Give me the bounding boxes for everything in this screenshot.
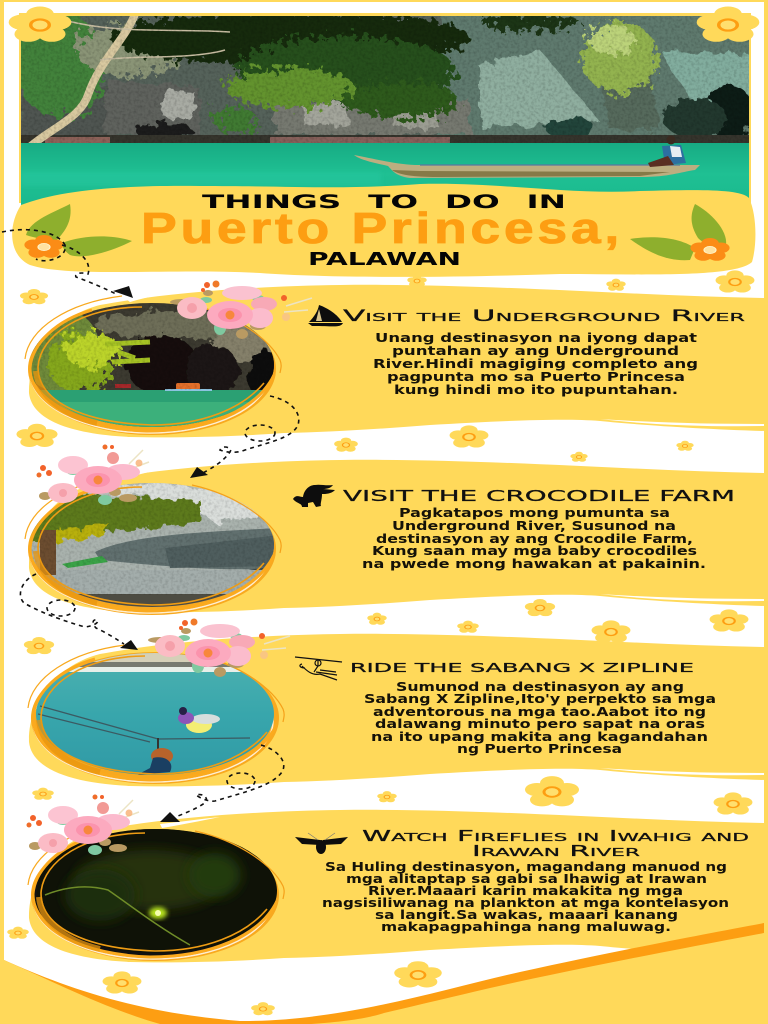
dashed arrow: panel 3 to panel 4 (160, 745, 284, 822)
dashed arrow: title to panel 1 (2, 230, 133, 298)
bottom yellow and orange swoosh (4, 923, 764, 1024)
icon: right leaves and flower (630, 204, 730, 261)
panel 2 body text: na pwede mong hawakan at pakainin. (362, 557, 706, 571)
title line: Palawan: PALAWAN (308, 249, 461, 270)
panel 2 icon: crocodile (293, 485, 335, 507)
panel 3 body text (364, 680, 716, 756)
section panels background (29, 285, 764, 962)
panel 4 body text: mga alitaptap sa gabi sa Ihawig at Irawan (346, 872, 707, 886)
panel 2 body text: destinasyon ay ang Crocodile Farm, (376, 532, 693, 546)
panel 2 photo: crocodile farm (25, 476, 281, 615)
panel 3 body text: ng Puerto Princesa (457, 742, 622, 756)
panel 4 body text: nagsisiliwanag na plankton at mga kontelasyon (322, 896, 729, 910)
panel 1 icon: sailboat (308, 305, 343, 326)
panel 4 heading (362, 827, 749, 860)
panel 2 body text: Underground River, Susunod na (392, 519, 676, 533)
boatman (648, 136, 686, 167)
panel 3 body text: dalawang minuto pero sapat na oras (375, 717, 705, 731)
panel 4 heading: Watch Fireflies in Iwahig and (362, 827, 749, 845)
panel 1 body text: Unang destinasyon na iyong dapat (375, 331, 697, 345)
panel 1 heading: Visit the Underground River (343, 306, 746, 325)
panel 3 photo: zipline over sea (28, 645, 284, 784)
panel 1 body text: kung hindi mo ito pupuntahan. (394, 383, 678, 397)
panel 4 flowers (26, 794, 139, 855)
panel 1 flowers (170, 280, 312, 339)
panel 2 body text: Kung saan may mga baby crocodiles (372, 544, 697, 558)
panel 1 body text: pagpunta mo sa Puerto Princesa (387, 370, 685, 384)
panel 3 body text: Sumunod na destinasyon ay ang (396, 680, 684, 694)
panel 3 body text: adventorous na mga tao.Aabot ito ng (373, 705, 706, 719)
title line: things to do in: THINGS TO DO IN (202, 191, 566, 213)
panel 3 body text: na ito upang makita ang kagandahan (371, 730, 708, 744)
panel 2 flowers (36, 444, 149, 505)
panel 1 body text (373, 331, 698, 397)
panel 2 body text (362, 506, 706, 571)
panel 4 body text: sa langit.Sa wakas, maaari kanang (375, 908, 678, 922)
panel 1 photo: underground river cave (20, 296, 281, 435)
panel 4 icon: firefly (295, 833, 348, 854)
dashed arrow: panel 2 to panel 3 (20, 574, 138, 650)
boat (354, 155, 700, 178)
dashed arrow: panel 1 to panel 2 (190, 396, 299, 478)
panel 1 body text: puntahan ay ang Underground (392, 344, 679, 358)
zipline rider (137, 738, 173, 775)
hero photo: Underground River lagoon (14, 8, 760, 205)
panel 3 heading: RIDE THE SABANG X ZIPLINE (350, 661, 694, 675)
panel 4 body text: River.Maaari karin makakita ng mga (368, 884, 683, 898)
panel 1 body text: River.Hindi magiging completo ang (373, 357, 698, 371)
panel 2 heading: VISIT THE CROCODILE FARM (343, 487, 735, 505)
panel 4 body text: makapagpahinga nang maluwag. (381, 920, 671, 934)
panel 3 flowers (148, 618, 290, 677)
panel 4 photo: firefly at night (28, 822, 284, 961)
title line: Puerto Princesa: Puerto Princesa, (141, 204, 623, 253)
panel 4 body text (322, 860, 729, 934)
panel 3 body text: Sabang X Zipline,Ito'y perpekto sa mga (364, 692, 716, 706)
title banner (12, 184, 755, 277)
icon: left leaves and flower (24, 204, 132, 258)
panel 4 heading: Irawan River (472, 842, 641, 860)
panel 4 body text: Sa Huling destinasyon, magandang manuod ng (325, 860, 727, 874)
panel 3 icon: zipline rider (295, 657, 342, 680)
cartoon firefly (178, 707, 220, 733)
panel 2 body text: Pagkatapos mong pumunta sa (399, 506, 670, 520)
